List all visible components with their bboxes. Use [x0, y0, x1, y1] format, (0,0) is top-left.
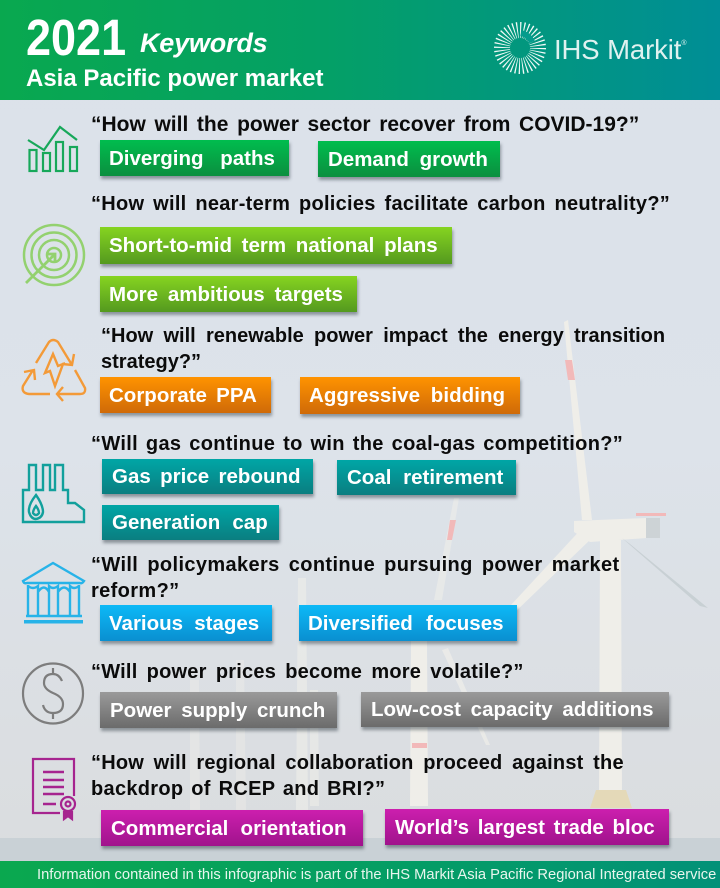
header band [0, 0, 720, 100]
question: strategy?” [101, 350, 201, 372]
keyword [102, 459, 313, 494]
keyword [385, 809, 669, 845]
keyword [100, 140, 289, 176]
question: “Will gas continue to win the coal-gas competition?” [91, 433, 623, 455]
question: reform?” [91, 580, 180, 602]
icon: institution [22, 562, 86, 624]
keyword: Low-cost capacity additions [371, 698, 654, 721]
title: 2021 [26, 9, 126, 66]
logo wordmark: IHS Markit® [554, 34, 686, 65]
icon: target [22, 224, 86, 286]
keyword: Gas price rebound [112, 465, 301, 488]
question [91, 752, 624, 800]
question: “How will the power sector recover from COVID-19?” [91, 113, 639, 136]
question: “How will renewable power impact the energy transition [101, 325, 665, 347]
keyword [361, 692, 669, 727]
keyword: Coal retirement [347, 466, 503, 489]
keyword: Various stages [109, 612, 259, 635]
icon: chart [28, 125, 78, 172]
question [91, 554, 620, 602]
icon: certificate [32, 758, 76, 822]
panel: regional collaboration [32, 752, 672, 851]
icon: recycling bolt [21, 338, 86, 402]
keyword [100, 276, 357, 312]
panel: market reform [22, 554, 620, 646]
footer band [0, 861, 720, 888]
keyword: World’s largest trade bloc [395, 816, 655, 839]
keyword [100, 605, 272, 641]
panel: COVID recovery [28, 113, 639, 182]
subtitle: Asia Pacific power market [26, 65, 323, 92]
keyword: Diverging paths [109, 147, 275, 170]
title keyword: Keywords [140, 28, 267, 58]
panel: carbon neutrality [22, 193, 670, 317]
keyword: Commercial orientation [111, 817, 346, 840]
keyword [100, 227, 452, 264]
question: “How will near-term policies facilitate carbon neutrality?” [91, 193, 670, 215]
keyword: Power supply crunch [110, 699, 325, 722]
question: “How will regional collaboration proceed against the [91, 752, 624, 774]
keyword [299, 605, 517, 641]
keyword [318, 141, 500, 177]
question: “Will policymakers continue pursuing power market [91, 554, 620, 576]
icon: gas plant [22, 464, 86, 524]
question: backdrop of RCEP and BRI?” [91, 778, 385, 800]
keyword [102, 505, 279, 540]
keyword: Aggressive bidding [309, 384, 505, 407]
panel: gas vs coal [22, 433, 623, 545]
keyword [300, 377, 520, 414]
question [101, 325, 665, 372]
keyword: Generation cap [112, 511, 268, 534]
logo: IHS Markit [494, 22, 686, 74]
icon: logo starburst [494, 22, 546, 74]
keyword: More ambitious targets [109, 283, 343, 306]
keyword: Diversified focuses [308, 612, 504, 635]
keyword [100, 692, 337, 728]
panel: renewable power [21, 325, 665, 419]
question: “Will power prices become more volatile?” [91, 661, 524, 683]
keyword: Demand growth [328, 148, 488, 171]
keyword [100, 377, 271, 413]
keyword [337, 460, 516, 495]
icon: dollar coin [22, 662, 84, 725]
keyword: Short-to-mid term national plans [109, 234, 438, 257]
panel: price volatility [22, 661, 672, 733]
footer note: Information contained in this infographic is part of the IHS Markit Asia Pacific Regional Integrated service [37, 867, 716, 883]
keyword [101, 810, 363, 846]
keyword: Corporate PPA [109, 384, 257, 407]
